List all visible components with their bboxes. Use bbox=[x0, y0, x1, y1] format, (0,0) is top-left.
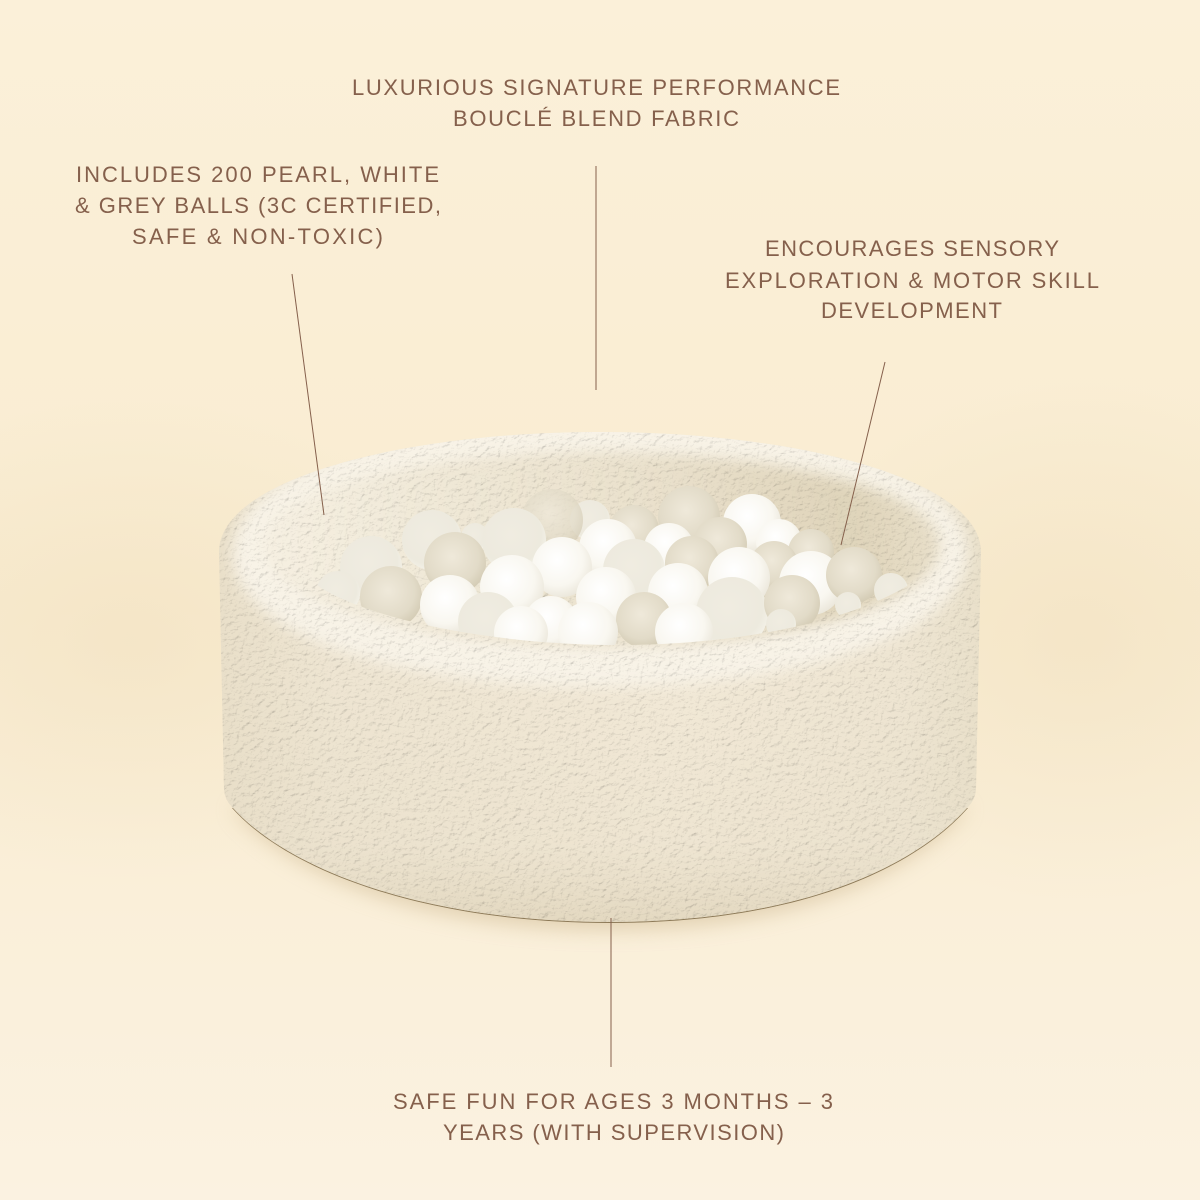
callout: balls included: SAFE & NON-TOXIC) bbox=[132, 224, 383, 249]
leader line: sensory bbox=[841, 362, 885, 545]
callout: ages bbox=[393, 1089, 833, 1145]
leader line: fabric bbox=[595, 166, 597, 390]
rim highlight bbox=[255, 441, 945, 665]
callout: balls included: & GREY BALLS (3C CERTIFIED, bbox=[75, 193, 441, 218]
balls bbox=[320, 486, 908, 645]
leader line: ages bbox=[610, 918, 612, 1067]
product: bouclé ball pit bbox=[219, 432, 981, 930]
callout: sensory development: DEVELOPMENT bbox=[821, 298, 1002, 323]
bowl body bbox=[219, 432, 981, 922]
callout: fabric: LUXURIOUS SIGNATURE PERFORMANCE bbox=[352, 75, 840, 100]
leader line: balls bbox=[292, 274, 324, 515]
callout: sensory development: EXPLORATION & MOTOR SKILL bbox=[725, 268, 1099, 293]
callout: fabric bbox=[352, 75, 840, 131]
callout: balls included: INCLUDES 200 PEARL, WHITE bbox=[76, 162, 439, 187]
callout: sensory development: ENCOURAGES SENSORY bbox=[765, 236, 1059, 261]
callout: fabric: BOUCLÉ BLEND FABRIC bbox=[453, 106, 739, 131]
callout: ages: YEARS (WITH SUPERVISION) bbox=[443, 1120, 784, 1145]
callout: ages: SAFE FUN FOR AGES 3 MONTHS – 3 bbox=[393, 1089, 833, 1114]
callout: sensory development bbox=[725, 236, 1099, 323]
callout: balls included bbox=[75, 162, 441, 249]
inner wall bbox=[262, 452, 940, 645]
